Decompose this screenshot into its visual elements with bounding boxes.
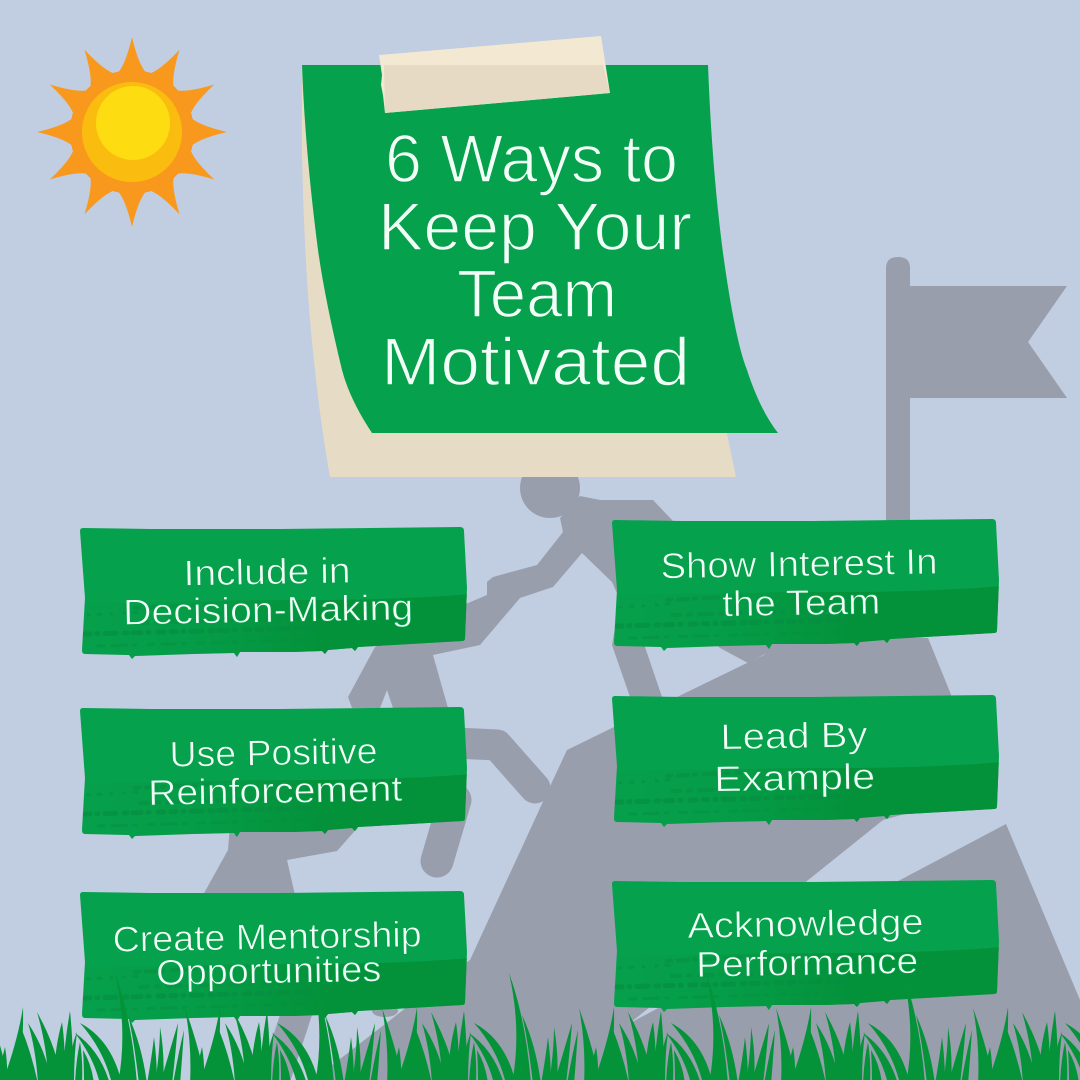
panel: Acknowledge Performance: Performance — [696, 940, 918, 985]
panel: Include in Decision-Making: Include in — [183, 550, 351, 594]
panel: Use Positive Reinforcement: Use Positive — [169, 730, 378, 775]
panel: Lead By Example: Example — [714, 756, 875, 799]
tape — [379, 36, 610, 113]
grass — [0, 973, 1080, 1080]
panel: Acknowledge Performance: Acknowledge — [687, 901, 924, 946]
second mountain — [600, 824, 1080, 1080]
panel: Use Positive Reinforcement — [80, 707, 470, 843]
main mountain — [305, 636, 990, 1080]
icon: sun — [37, 37, 227, 227]
panel: Show Interest In the Team: the Team — [722, 581, 880, 624]
flag on the summit — [886, 257, 1067, 540]
heading: Team — [457, 256, 617, 332]
panel: Include in Decision-Making: Decision-Making — [123, 587, 414, 633]
panel: title sticky note — [302, 36, 778, 477]
panel: Use Positive Reinforcement: Reinforcement — [148, 768, 403, 813]
panel: Include in Decision-Making — [80, 527, 470, 663]
heading: Motivated — [381, 324, 690, 400]
heading: Keep Your — [378, 189, 692, 265]
panel: Show Interest In the Team — [612, 519, 1002, 655]
panel: Lead By Example: Lead By — [720, 714, 868, 757]
lower climber — [203, 743, 535, 1080]
panel: Create Mentorship Opportunities: Opportunities — [156, 948, 382, 993]
panel: Show Interest In the Team: Show Interest In — [660, 541, 938, 586]
note backing sheet — [302, 66, 736, 477]
heading: 6 Ways to — [385, 121, 678, 197]
heading — [378, 121, 692, 400]
panel: Create Mentorship Opportunities: Create Mentorship — [112, 913, 422, 960]
upper climber — [348, 458, 790, 708]
green note face — [302, 65, 778, 433]
panel: Create Mentorship Opportunities — [80, 891, 470, 1027]
panel: Lead By Example — [612, 695, 1002, 831]
panel: Acknowledge Performance — [612, 880, 1002, 1016]
silhouette: mountains, climbers and flag — [203, 257, 1080, 1080]
